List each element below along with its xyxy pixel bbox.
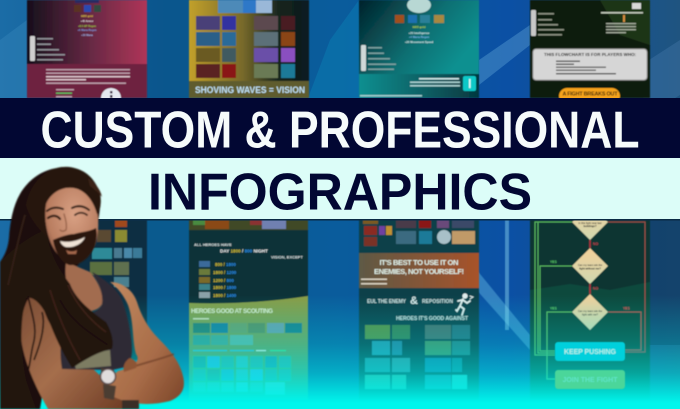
vision table: 1800 / 1800: [213, 285, 237, 290]
panel: top teal infographic: [359, 0, 479, 98]
hair strands: [8, 215, 108, 378]
flowchart connectors: [535, 222, 645, 379]
scouting section: HEROES GOOD AT SCOUTING: [191, 308, 273, 315]
stats text: +20 Movement Speed: [405, 40, 434, 44]
hero portraits: [196, 0, 295, 78]
person: smiling long-haired man with crossed arms: [0, 167, 184, 409]
decision diamond 2: Can my team win the: [578, 263, 603, 267]
hero grid: [365, 325, 470, 389]
decision diamond 1: in this fight near last: [578, 221, 602, 225]
heading: heroes it's good against: HEROES IT'S GOOD AGAINST: [396, 316, 469, 322]
branch labels: YES: [623, 306, 631, 310]
stats text: [78, 14, 97, 37]
panel: top left crimson infographic: [27, 0, 147, 108]
vision table: 1200 / 800: [213, 278, 234, 283]
orange banner: ENEMIES, NOT YOURSELF!: [374, 267, 464, 276]
far arm: [21, 295, 126, 409]
button: keep pushing: KEEP PUSHING: [564, 349, 617, 356]
action row: REPOSITION: [422, 299, 453, 305]
action row: [367, 295, 453, 307]
vision heading: [194, 242, 303, 260]
tank top: [60, 272, 132, 370]
icon: running figure: [456, 294, 473, 315]
branch labels: NO: [593, 286, 598, 290]
branch labels: NO: [593, 242, 598, 246]
decision diamond 2: [572, 248, 608, 284]
face: [45, 188, 98, 263]
vision table: 1800 / 1400: [213, 293, 237, 298]
vision heading: VISION, EXCEPT: [271, 254, 303, 260]
vision table: [199, 261, 237, 298]
panel: bottom flowchart: [530, 205, 650, 400]
decision diamond 3: Can my team win the: [578, 309, 603, 313]
callout: a fight breaks out: A FIGHT BREAKS OUT: [562, 92, 618, 98]
stats text: +45 Armor: [81, 19, 93, 23]
stats text: +8.5 HP Regen: [78, 24, 96, 28]
vision heading: DAY 1800 / 800 NIGHT: [220, 248, 268, 254]
vision table: 1800 / 1200: [213, 270, 237, 275]
hair tuft right: [88, 178, 102, 197]
branch labels: YES: [550, 260, 558, 264]
panel: bottom best-used-on-enemies infographic: [359, 220, 479, 400]
button: join the fight: JOIN THE FIGHT: [562, 377, 618, 384]
decision diamond 2: fight without me?: [579, 266, 601, 270]
stats text: +20 Intelligence: [409, 31, 430, 35]
stats text: +30 Mana: [81, 33, 93, 37]
upgrade box: [359, 74, 479, 98]
back hair mass: [0, 167, 101, 409]
callout: who the flowchart is for: THIS FLOWCHART IS FOR PLAYERS WHO:: [544, 52, 637, 57]
stats text: +4 Mana Regen: [409, 35, 430, 39]
button: join the fight: [555, 370, 625, 389]
orange banner: [359, 253, 479, 288]
social icons: [361, 45, 396, 71]
title band: infographics: [0, 158, 680, 222]
stats text: 9955 gold: [413, 25, 426, 29]
panel: bottom left hero grid: [27, 220, 147, 360]
decision diamond 3: [572, 294, 608, 330]
action row: EUL THE ENEMY: [367, 299, 407, 305]
social icons: [531, 10, 564, 36]
heading band: SHOVING WAVES = VISION: [195, 85, 305, 96]
panel: top flowchart intro: [530, 0, 650, 104]
wristwatch: [100, 368, 116, 400]
long hair over chest: [0, 230, 113, 409]
branch labels: YES: [550, 306, 558, 310]
decision diamond 1: [572, 205, 608, 240]
stats text: [405, 25, 434, 44]
beard and smile: [53, 228, 97, 265]
strap shadow at bottom: [122, 400, 139, 409]
vision heading: ALL HEROES HAVE: [194, 242, 232, 247]
button: keep pushing: [555, 342, 625, 361]
coaching note: [601, 3, 643, 33]
eyes and brows: [47, 206, 89, 231]
forearm crease: [132, 354, 174, 367]
panel: top shoving waves infographic: [189, 0, 309, 98]
vision table: 800 / 1800: [215, 262, 236, 267]
orange banner: IT'S BEST TO USE IT ON: [380, 258, 458, 267]
stats text: +6 Mana Regen: [78, 28, 97, 32]
chest: [65, 262, 102, 311]
front hair over forehead: [26, 167, 101, 238]
action row: &: [410, 295, 418, 307]
scouting section: [189, 296, 308, 400]
hero and items: [395, 0, 444, 23]
item icons: [74, 0, 101, 12]
title band: infographics: INFOGRAPHICS: [148, 164, 532, 222]
bottom cyan glow: [0, 295, 680, 409]
decision diamond 3: fight with me?: [582, 312, 599, 316]
branch labels: [550, 242, 631, 310]
scouting hero grid: [193, 350, 291, 395]
social icons: [30, 36, 65, 61]
decision diamond 1: buildings?: [583, 224, 597, 228]
panel: bottom vision infographic: [189, 220, 308, 400]
top hero row: [363, 220, 475, 246]
description box: [27, 64, 147, 108]
near arm: [108, 282, 184, 404]
stats text: 9955 gold: [81, 14, 93, 18]
